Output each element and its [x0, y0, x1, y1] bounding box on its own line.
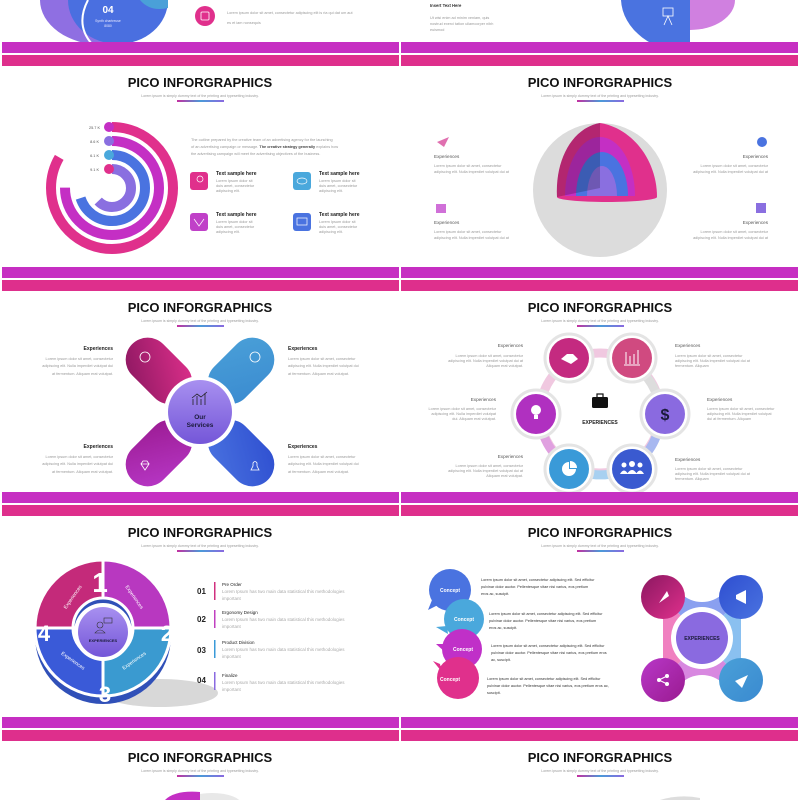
step 02	[197, 610, 345, 629]
step 01: important	[222, 596, 242, 601]
heading	[528, 75, 673, 102]
text: Lorem ipsum dolor sit amet, consectetur adipiscing elit is ria qui dat um aut	[227, 11, 354, 15]
paragraph: of an advertising campaign or message. The creative strategy generally explains how	[191, 145, 338, 149]
number 04: 04	[102, 5, 114, 16]
text: bottom left: Experiences	[84, 444, 113, 450]
text: middle left: adipiscing elit. Nulla imperdiet volutpat	[431, 412, 497, 416]
text: top right	[675, 343, 751, 368]
heading: PICO INFORGRAPHICS	[128, 750, 273, 765]
text: top right: at fermentum. Aliquam erat volutpat.	[288, 372, 349, 376]
item 1	[190, 171, 257, 193]
heading: PICO INFORGRAPHICS	[528, 525, 673, 540]
text block: nostrud exerci tation ullamcorper nibh	[430, 22, 493, 26]
step 04	[197, 672, 345, 692]
paragraph: the advertising campaign will meet the advertising objectives of the business.	[191, 152, 320, 156]
item 4: Lorem Ipsum dolor sit	[319, 220, 356, 224]
text: es et iam nonsequis	[227, 21, 261, 25]
text: top left: Lorem ipsum dolor sit amet, consectetur	[434, 164, 502, 168]
text: top left	[434, 137, 510, 174]
concept bubbles: Concept	[453, 647, 473, 653]
x diagram: Our	[194, 414, 206, 421]
item 1: Text sample here	[216, 171, 257, 177]
text: bottom right: at fermentum. Aliquam erat volutpat.	[288, 470, 349, 474]
concept texts: pulvinar dolor auctor. Pellentesque vitae nisi varius, eos pretium	[481, 585, 588, 589]
number 04	[95, 5, 121, 28]
item 3: duis amet, consectetur	[216, 225, 255, 229]
step 04: Finalize	[222, 673, 238, 678]
text: middle left: dui. Aliquam erat volutpat.	[452, 417, 496, 421]
text: top left: Aliquam erat volutpat.	[486, 364, 523, 368]
step 04: important	[222, 687, 242, 692]
number 04: Synth chartreuse	[95, 19, 121, 23]
text: top left	[448, 343, 524, 368]
text: top right: Experiences	[743, 154, 769, 159]
cycle circle: 3	[99, 682, 111, 707]
concept bubbles: Concept	[454, 617, 474, 623]
text: top left: Lorem ipsum dolor sit amet, consectetur	[455, 354, 524, 358]
heading	[128, 750, 273, 777]
chart labels: 25.7 K	[89, 126, 100, 130]
ring chart	[51, 122, 173, 249]
cycle circle: 2	[161, 621, 173, 646]
heading: Lorem ipsum is simply dummy text of the printing and typesetting industry.	[141, 94, 259, 98]
divider bars row 3	[2, 492, 798, 516]
step 01	[197, 582, 345, 601]
chart labels	[89, 126, 100, 172]
text: middle right: adipiscing elit. Nulla imperdiet volutpat	[707, 412, 773, 416]
chart labels: 9.1 K	[90, 168, 99, 172]
concept texts: Lorem ipsum dolor sit amet, consectetur adipiscing elit. Sed efficitur	[487, 677, 601, 681]
cycle circle: Experiences	[123, 584, 144, 611]
item 2: Text sample here	[319, 171, 360, 177]
item 4: Text sample here	[319, 212, 360, 218]
item 4: duis amet, consectetur	[319, 225, 358, 229]
text: top left: adipiscing elit. Nulla imperdiet volutpat dui at	[434, 170, 510, 174]
step 04: Lorem Ipsum has two main data statistical this methodologies	[222, 680, 345, 685]
text: top right: fermentum. Aliquam	[675, 364, 709, 368]
item 3: Text sample here	[216, 212, 257, 218]
text: bottom left: adipiscing elit. Nulla imperdiet volutpat dui at	[448, 469, 524, 473]
text: middle right: Experiences	[707, 397, 733, 402]
cycle circle: 1	[92, 567, 108, 598]
x diagram	[117, 329, 283, 495]
item 2: Lorem Ipsum dolor sit	[319, 179, 356, 183]
text: bottom left: Lorem ipsum dolor sit amet, consectetur	[434, 230, 502, 234]
heading	[528, 750, 673, 777]
heading: Lorem ipsum is simply dummy text of the printing and typesetting industry.	[141, 319, 259, 323]
heading: PICO INFORGRAPHICS	[528, 300, 673, 315]
text: bottom left: Lorem ipsum dolor sit amet, consectetur	[455, 464, 524, 468]
text: top left	[42, 346, 114, 376]
concept texts: Lorem ipsum dolor sit amet, consectetur adipiscing elit. Sed efficitur	[491, 644, 605, 648]
partial shape	[165, 792, 242, 800]
concept texts: eros ac, suscipit.	[489, 626, 517, 630]
partial shape	[660, 796, 700, 800]
text: bottom right	[675, 457, 751, 481]
text: top left: Experiences	[84, 346, 113, 352]
text	[227, 11, 354, 25]
icon: pink circle	[195, 6, 215, 26]
text block: Insert Text Here	[430, 3, 462, 8]
text: bottom right: adipiscing elit. Nulla imperdiet volutpat dui at	[675, 472, 751, 476]
step 03: Product Division	[222, 640, 255, 645]
cycle diagram: EXPERIENCES	[582, 420, 618, 426]
top partial slide right	[430, 0, 735, 53]
step 02: 02	[197, 615, 206, 624]
text: top left: adipiscing elit. Nulla imperdiet volutpat dui	[42, 364, 113, 368]
panel: sphere slide	[434, 75, 769, 257]
chart labels: 6.1 K	[90, 154, 99, 158]
blob shape	[40, 0, 168, 45]
text: middle right: Lorem ipsum dolor sit amet, consectetur	[707, 407, 775, 411]
text: top right	[288, 346, 359, 376]
item 4	[293, 212, 360, 234]
step 01: Lorem Ipsum has two main data statistical this methodologies	[222, 589, 345, 594]
heading	[528, 525, 673, 552]
text: middle left: Experiences	[471, 397, 497, 402]
cycle diagram: $	[661, 407, 670, 424]
text: bottom left	[42, 444, 114, 474]
panel: ring chart slide	[51, 75, 360, 249]
panel: bottom partial slide right	[528, 750, 700, 800]
text block: euismod	[430, 28, 444, 32]
heading: Lorem ipsum is simply dummy text of the printing and typesetting industry.	[541, 94, 659, 98]
cycle circle	[35, 560, 218, 707]
heading	[528, 300, 673, 327]
concept texts: Lorem ipsum dolor sit amet, consectetur adipiscing elit. Sed efficitur	[489, 612, 603, 616]
panel: bottom partial slide left	[128, 750, 273, 800]
concept texts: pulvinar dolor auctor. Pellentesque vitae nisi varius, eos pretium eros ac,	[487, 684, 609, 688]
text: middle left	[428, 397, 497, 421]
text: bottom right: adipiscing elit. Nulla imperdiet volutpat dui	[288, 462, 359, 466]
step list	[197, 582, 345, 692]
text: top right: Lorem ipsum dolor sit amet, consectetur	[288, 357, 356, 361]
sphere chart	[533, 123, 667, 257]
step 01: Pre Order	[222, 582, 242, 587]
text: top left: Experiences	[498, 343, 524, 348]
heading: Lorem ipsum is simply dummy text of the printing and typesetting industry.	[141, 769, 259, 773]
text: bottom left: Lorem ipsum dolor sit amet, consectetur	[45, 455, 114, 459]
text: top right: Experiences	[675, 343, 701, 348]
chart labels: 8.6 K	[90, 140, 99, 144]
pie shape	[621, 0, 735, 53]
step 03: important	[222, 654, 242, 659]
four circle diagram	[607, 542, 797, 735]
text: bottom left: Experiences	[498, 454, 524, 459]
heading: PICO INFORGRAPHICS	[128, 300, 273, 315]
panel: concept slide	[428, 525, 797, 735]
text: bottom left	[448, 454, 524, 478]
item 1: adipiscing elit.	[216, 189, 240, 193]
concept texts	[481, 578, 609, 695]
text: bottom right: adipiscing elit. Nulla imperdiet volutpat dui at	[693, 236, 769, 240]
heading: Lorem ipsum is simply dummy text of the printing and typesetting industry.	[541, 769, 659, 773]
panel: our services slide	[42, 300, 359, 495]
item 3	[190, 212, 257, 234]
text: bottom left: adipiscing elit. Nulla imperdiet volutpat dui	[42, 462, 113, 466]
text block	[430, 3, 493, 32]
text: middle left: Lorem ipsum dolor sit amet, consectetur	[428, 407, 497, 411]
text: bottom right: Experiences	[675, 457, 701, 462]
text: bottom left: at fermentum. Aliquam erat volutpat.	[52, 470, 113, 474]
heading: PICO INFORGRAPHICS	[528, 75, 673, 90]
text: bottom right: fermentum. Aliquam	[675, 477, 709, 481]
text: top right: adipiscing elit. Nulla imperdiet volutpat dui	[288, 364, 359, 368]
number 04: 8080	[104, 24, 112, 28]
text: bottom right: Experiences	[288, 444, 318, 450]
step 04: 04	[197, 676, 206, 685]
top partial slide left	[40, 0, 354, 45]
concept bubbles	[428, 569, 484, 699]
step 03	[197, 640, 345, 659]
panel: hexagon cycle slide	[428, 300, 775, 493]
paragraph: The outline prepared by the creative team of an advertising agency for the launching	[191, 138, 333, 142]
step 02: Lorem Ipsum has two main data statistical this methodologies	[222, 617, 345, 622]
cycle circle: Experiences	[60, 651, 86, 672]
concept bubbles: Concept	[440, 588, 460, 594]
step 02: important	[222, 624, 242, 629]
text: top left: Experiences	[434, 154, 460, 159]
step 02: Ergonomy Design	[222, 610, 258, 615]
text: top left: Lorem ipsum dolor sit amet, consectetur	[45, 357, 114, 361]
concept bubbles: Concept	[440, 677, 460, 683]
item 3: adipiscing elit.	[216, 230, 240, 234]
concept texts: suscipit.	[487, 691, 501, 695]
divider bars row 4	[2, 717, 798, 741]
concept texts: ac, suscipit.	[491, 658, 511, 662]
item 1: duis amet, consectetur	[216, 184, 255, 188]
item 2: duis amet, consectetur	[319, 184, 358, 188]
heading	[128, 75, 273, 102]
heading: PICO INFORGRAPHICS	[528, 750, 673, 765]
text: bottom right	[288, 444, 359, 474]
heading	[128, 525, 273, 552]
cycle circle: EXPERIENCES	[89, 638, 118, 643]
step 01: 01	[197, 587, 206, 596]
concept texts: eros ac, suscipit.	[481, 592, 509, 596]
item 2: adipiscing elit.	[319, 189, 343, 193]
heading: PICO INFORGRAPHICS	[128, 525, 273, 540]
text: bottom right: Experiences	[743, 220, 769, 225]
text: bottom left: Aliquam erat volutpat.	[486, 474, 523, 478]
concept texts: pulvinar dolor auctor. Pellentesque vitae nisi varius, eos pretium	[489, 619, 596, 623]
item 3: Lorem Ipsum dolor sit	[216, 220, 253, 224]
text: top right: Lorem ipsum dolor sit amet, consectetur	[700, 164, 769, 168]
heading: PICO INFORGRAPHICS	[128, 75, 273, 90]
text block: Ut wisi enim ad minim veniam, quis	[430, 16, 489, 20]
paragraph	[191, 138, 338, 156]
x diagram: Services	[187, 422, 214, 429]
step 03: 03	[197, 646, 206, 655]
text: top right: Lorem ipsum dolor sit amet, consectetur	[675, 354, 743, 358]
heading: Lorem ipsum is simply dummy text of the printing and typesetting industry.	[541, 544, 659, 548]
concept texts: pulvinar dolor auctor. Pellentesque vitae nisi varius, eos pretium eros	[491, 651, 607, 655]
text: top right: adipiscing elit. Nulla imperdiet volutpat dui at	[693, 170, 769, 174]
text: bottom right: Lorem ipsum dolor sit amet, consectetur	[288, 455, 356, 459]
heading	[128, 300, 273, 327]
text: bottom right	[693, 203, 769, 240]
text: top right: Experiences	[288, 346, 318, 352]
panel: four step circle slide	[35, 525, 345, 707]
text: bottom right: Lorem ipsum dolor sit amet, consectetur	[675, 467, 743, 471]
divider bars row 2	[2, 267, 798, 291]
text: top right	[693, 137, 769, 174]
cycle circle: Experiences	[63, 584, 84, 610]
text: bottom left: adipiscing elit. Nulla imperdiet volutpat dui at	[434, 236, 510, 240]
item 1: Lorem Ipsum dolor sit	[216, 179, 253, 183]
cycle circle: Experiences	[121, 651, 148, 672]
text: top right: adipiscing elit. Nulla imperdiet volutpat dui at	[675, 359, 751, 363]
text: bottom left	[434, 204, 510, 240]
divider bars row 1	[2, 42, 798, 66]
heading: Lorem ipsum is simply dummy text of the printing and typesetting industry.	[541, 319, 659, 323]
item 2	[293, 171, 360, 193]
item 4: adipiscing elit.	[319, 230, 343, 234]
four circle diagram: EXPERIENCES	[684, 636, 720, 642]
concept texts: Lorem ipsum dolor sit amet, consectetur adipiscing elit. Sed efficitur	[481, 578, 595, 582]
text: middle right: dui at fermentum. Aliquam	[707, 417, 751, 421]
cycle circle: 4	[38, 621, 51, 646]
heading: Lorem ipsum is simply dummy text of the printing and typesetting industry.	[141, 544, 259, 548]
text: bottom right: Lorem ipsum dolor sit amet, consectetur	[700, 230, 769, 234]
text: top left: adipiscing elit. Nulla imperdiet volutpat dui at	[448, 359, 524, 363]
text: top left: at fermentum. Aliquam erat volutpat.	[52, 372, 113, 376]
text: bottom left: Experiences	[434, 220, 460, 225]
cycle diagram	[512, 334, 689, 493]
step 03: Lorem Ipsum has two main data statistical this methodologies	[222, 647, 345, 652]
text: middle right	[707, 397, 775, 421]
